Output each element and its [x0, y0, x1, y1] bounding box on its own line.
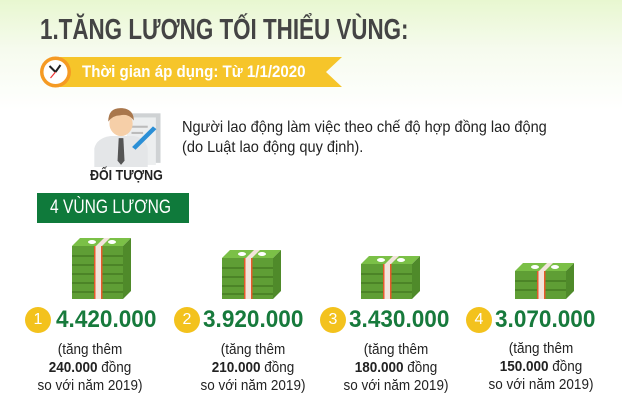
icon: money stack 2 [222, 250, 281, 299]
text: target description [182, 119, 547, 156]
icon: person with document [94, 108, 160, 167]
icon: clock [40, 56, 71, 88]
region 4 [466, 306, 595, 393]
note 3: so với năm 2019) [344, 377, 448, 394]
note 2 [200, 341, 305, 394]
value 4: 3.070.000 [495, 306, 595, 333]
note 1 [38, 341, 142, 394]
note 2: so với năm 2019) [201, 377, 305, 394]
badge 4: 4 [475, 311, 483, 328]
badge 1: 1 [34, 311, 42, 328]
text: target description: (do Luật lao động quy định). [182, 139, 363, 156]
title: 1.TĂNG LƯƠNG TỐI THIỂU VÙNG: [40, 14, 409, 46]
note 2: 210.000 đồng [212, 359, 294, 376]
note 3: 180.000 đồng [355, 359, 437, 376]
label: đối tượng: ĐỐI TƯỢNG [90, 167, 163, 184]
note 4: (tăng thêm [509, 340, 573, 357]
region 2 [174, 306, 305, 394]
badge 4 [466, 307, 492, 333]
heading box: 4 vùng lương: 4 VÙNG LƯƠNG [50, 197, 171, 218]
badge 3: 3 [329, 311, 337, 328]
note 3 [344, 341, 448, 394]
ribbon: effective date: Thời gian áp dụng: Từ 1/1/2020 [82, 62, 306, 81]
note 4: 150.000 đồng [500, 358, 582, 375]
value 2: 3.920.000 [203, 306, 303, 333]
note 2: (tăng thêm [221, 341, 285, 358]
badge 1 [25, 307, 51, 333]
note 1: (tăng thêm [58, 341, 122, 358]
note 3: (tăng thêm [364, 341, 428, 358]
heading box: 4 vùng lương [37, 193, 189, 223]
value 1: 4.420.000 [56, 306, 156, 333]
icon: money stack 1 [72, 238, 131, 299]
badge 2 [174, 307, 200, 333]
region 1 [25, 306, 156, 394]
icon: money stack 4 [515, 263, 574, 299]
icon: money stack 3 [361, 256, 420, 299]
ribbon: effective date [40, 56, 342, 88]
value 3: 3.430.000 [349, 306, 449, 333]
badge 2: 2 [183, 311, 191, 328]
badge 3 [320, 307, 346, 333]
text: target description: Người lao động làm việc theo chế độ hợp đồng lao động [182, 119, 547, 136]
note 1: so với năm 2019) [38, 377, 142, 394]
note 4 [488, 340, 593, 393]
note 1: 240.000 đồng [49, 359, 131, 376]
region 3 [320, 306, 449, 394]
note 4: so với năm 2019) [489, 376, 593, 393]
